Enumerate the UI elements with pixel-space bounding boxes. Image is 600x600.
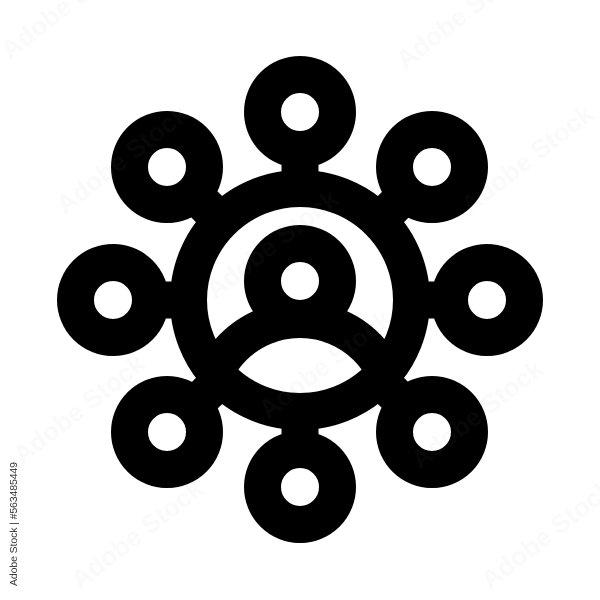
icon: user network [76, 74, 524, 524]
outer nodes [76, 74, 524, 524]
watermark: Adobe Stock [253, 303, 397, 425]
watermark: Adobe Stock [200, 183, 344, 305]
connectors between hub and outer nodes [113, 112, 487, 488]
watermark: Adobe Stock [65, 473, 209, 595]
central hub ring [188, 188, 412, 412]
watermark: Adobe Stock [7, 348, 151, 470]
person head [262, 244, 338, 318]
person body [216, 311, 384, 370]
central hub white disc [188, 188, 412, 412]
watermark: Adobe Stock [455, 98, 599, 220]
watermark: Adobe Stock [405, 353, 549, 475]
watermark: Adobe Stock [50, 98, 194, 220]
stock id caption: Adobe Stock | #563485449 [8, 462, 20, 586]
